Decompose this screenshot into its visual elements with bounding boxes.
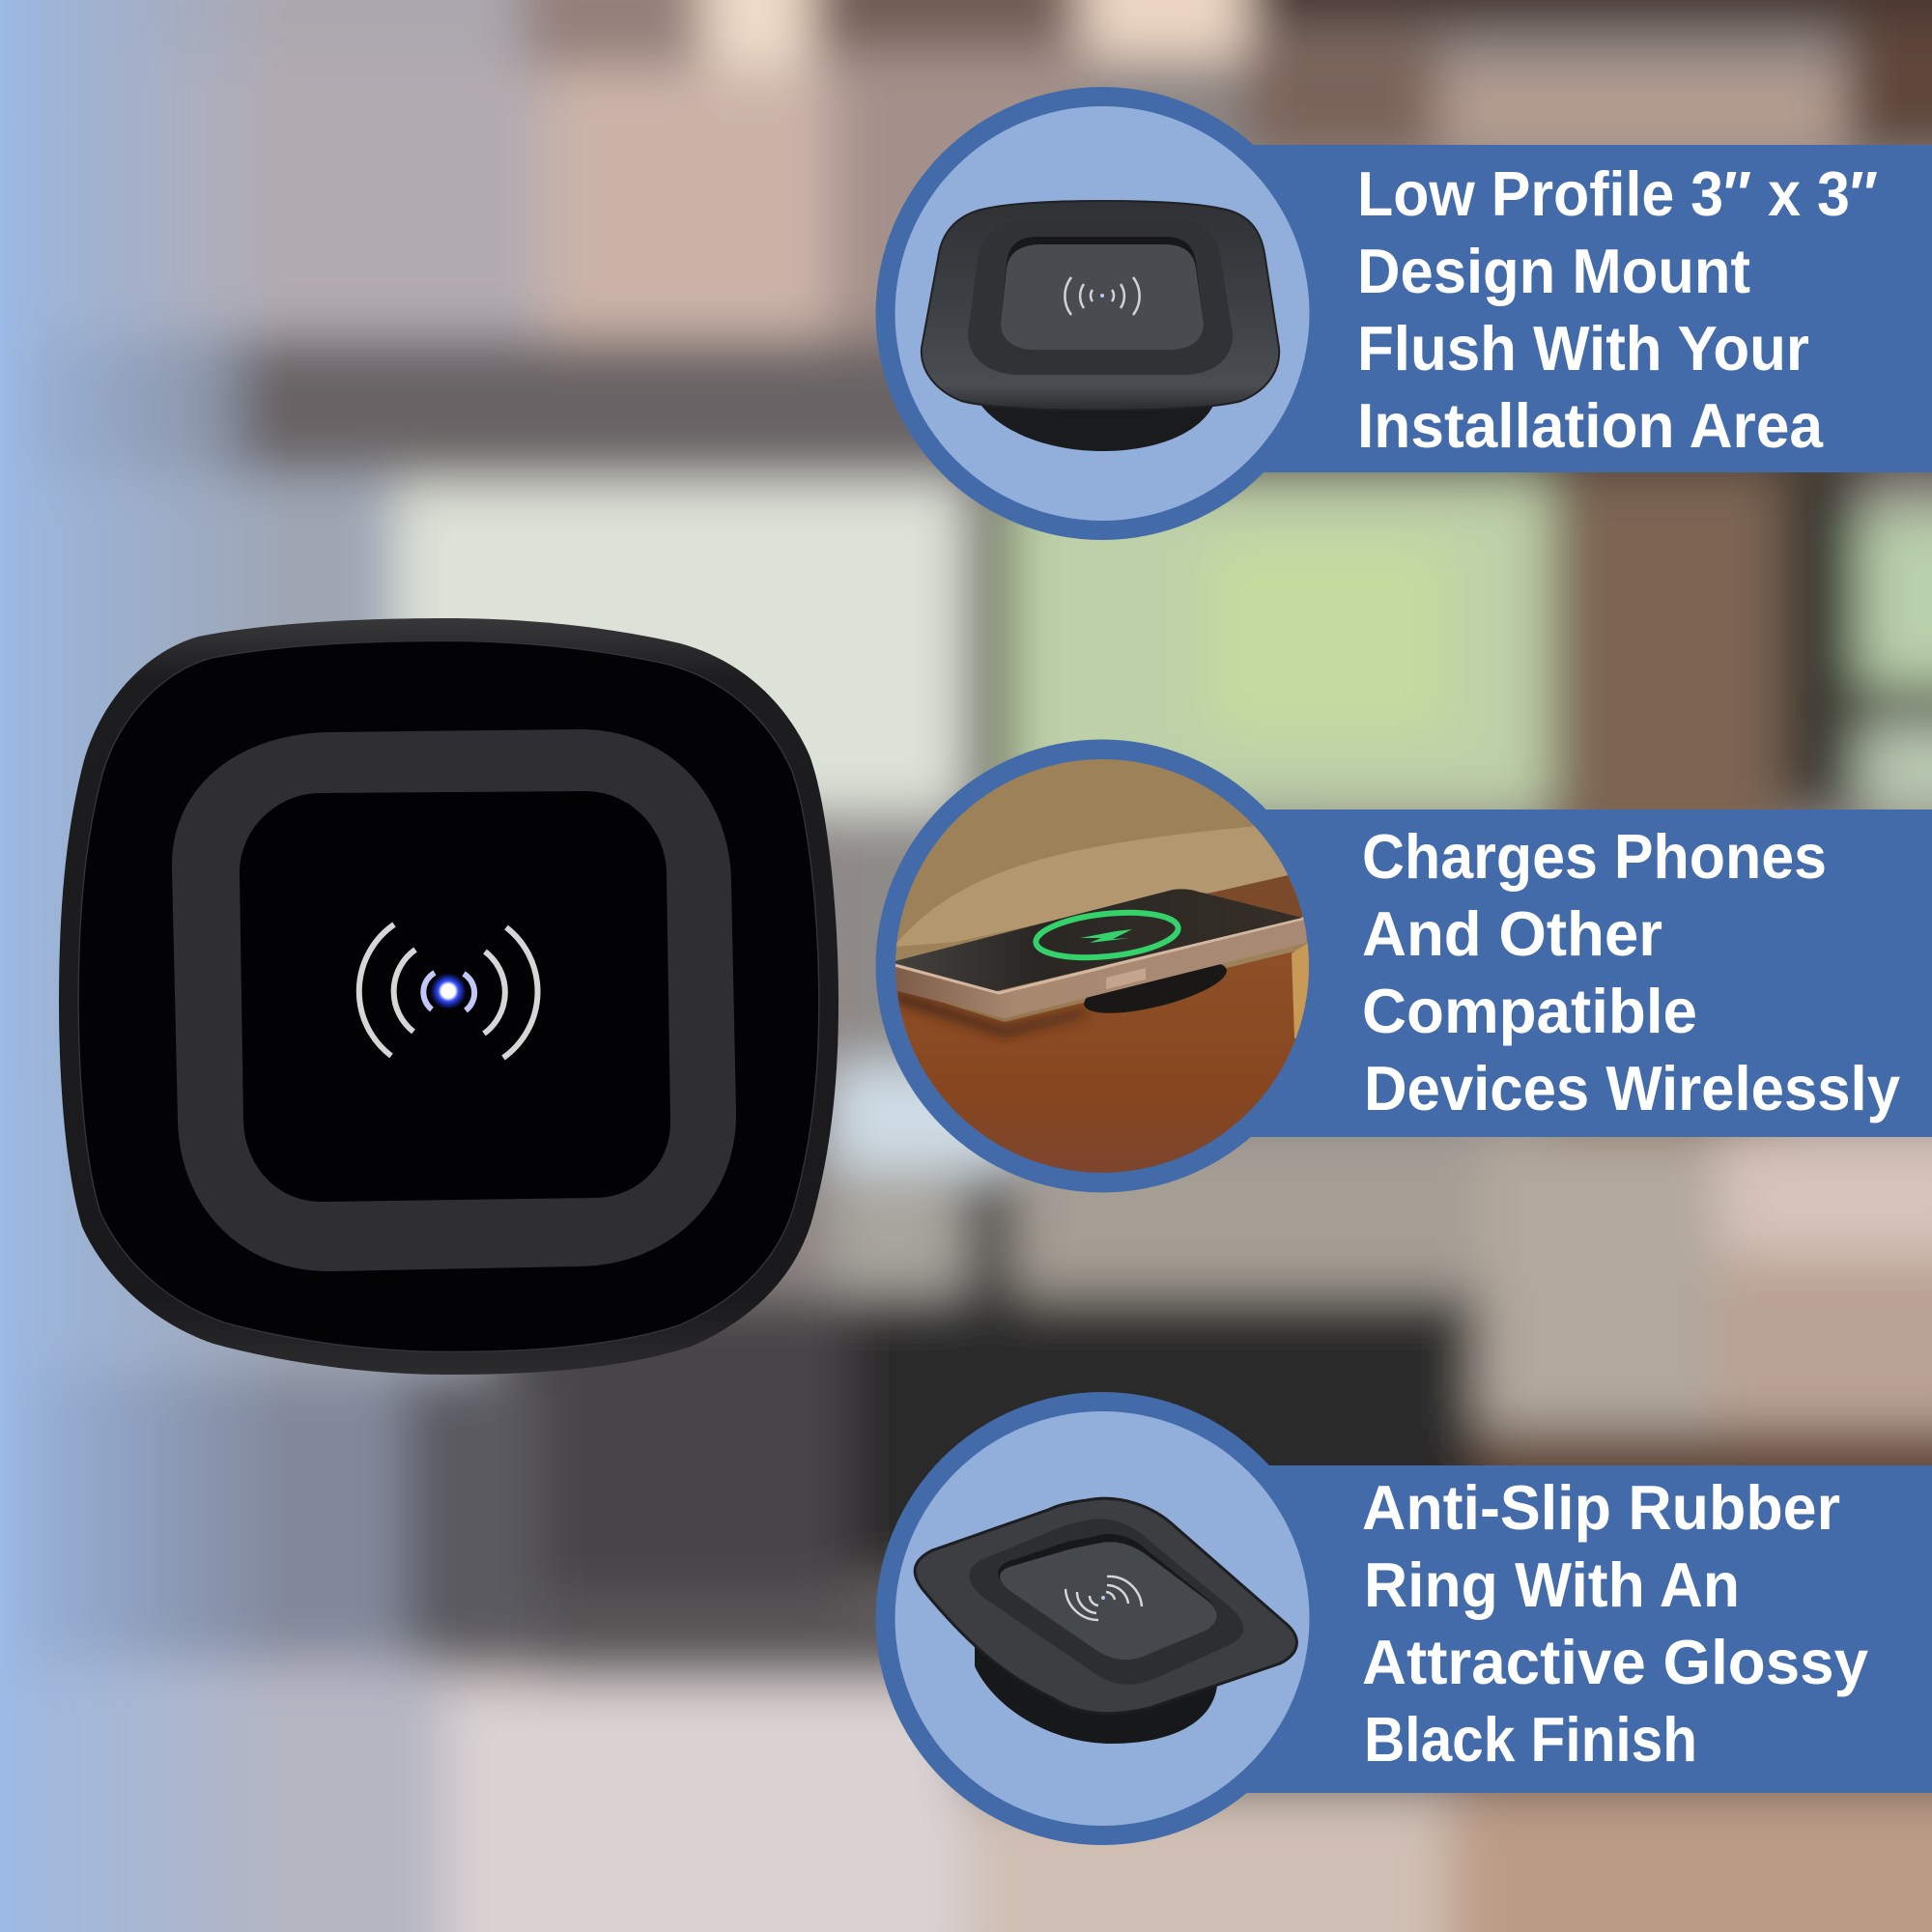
- circle ring: [875, 740, 1329, 1192]
- product: side view of mount: [922, 201, 1279, 451]
- caption: Attractive Glossy: [1362, 1627, 1868, 1697]
- circle inner: [895, 1411, 1310, 1826]
- caption: Design Mount: [1357, 236, 1750, 306]
- pad surface: [1001, 244, 1204, 350]
- icon: signal: [1065, 277, 1140, 315]
- light wood end: [1292, 942, 1310, 1038]
- charger black face: [78, 640, 819, 1351]
- icon: wireless signal with blue LED: [359, 924, 538, 1058]
- mount base dome: [981, 406, 1213, 451]
- pad surface: [1000, 1542, 1217, 1660]
- grey rubber ring: [172, 729, 736, 1271]
- large product: wireless charger top view: [59, 618, 838, 1375]
- dark wood strip: [1208, 875, 1306, 927]
- feature row 3: anti-slip ring: [875, 1392, 1932, 1845]
- phone side: [891, 918, 1306, 1018]
- feature row 1: low profile: [875, 87, 1932, 540]
- phone screen: [891, 889, 1302, 991]
- caption: Anti-Slip Rubber: [1362, 1472, 1840, 1543]
- charge bolt: [1080, 929, 1132, 943]
- blue banner: [1246, 810, 1932, 1137]
- pad recess: [998, 1534, 1217, 1660]
- caption: [1362, 1472, 1868, 1775]
- icon: signal: [1065, 1577, 1142, 1620]
- plate ring: [968, 220, 1233, 375]
- caption: Ring With An: [1364, 1549, 1740, 1620]
- phone button: [1106, 968, 1146, 989]
- mount plate: [922, 201, 1279, 411]
- caption: Black Finish: [1364, 1704, 1697, 1775]
- phone edge highlight: [891, 918, 1306, 993]
- pad recess: [1001, 237, 1204, 350]
- phone shadow: [894, 991, 1092, 1036]
- charger outer rim: [59, 618, 838, 1375]
- product: angled view of mount: [915, 1498, 1296, 1744]
- caption: Devices Wirelessly: [1364, 1053, 1900, 1123]
- caption: Flush With Your: [1357, 313, 1809, 384]
- circle ring: [875, 87, 1329, 540]
- black centre pad: [240, 791, 670, 1202]
- mount base: [975, 1633, 1217, 1744]
- feature row 2: wireless charging: [875, 740, 1932, 1192]
- caption: Low Profile 3″ x 3″: [1357, 158, 1878, 229]
- circle ring: [875, 1392, 1329, 1845]
- caption: Installation Area: [1357, 390, 1824, 461]
- caption: Compatible: [1362, 976, 1697, 1046]
- plate ring: [970, 1519, 1243, 1685]
- wall backdrop: [889, 753, 1314, 1043]
- caption: [1362, 821, 1900, 1123]
- blue banner: [1246, 1465, 1932, 1793]
- photo: phone charging on furniture: [889, 753, 1314, 1188]
- charger under phone: [1084, 964, 1227, 1013]
- cream cushion: [894, 821, 1314, 947]
- caption: And Other: [1362, 898, 1662, 969]
- wood table: [889, 947, 1314, 1188]
- caption: [1357, 158, 1878, 461]
- blue banner: [1246, 145, 1932, 472]
- green charge ring: [1034, 906, 1180, 964]
- caption: Charges Phones: [1362, 821, 1827, 892]
- circle inner: [895, 106, 1310, 521]
- mount plate: [915, 1498, 1296, 1714]
